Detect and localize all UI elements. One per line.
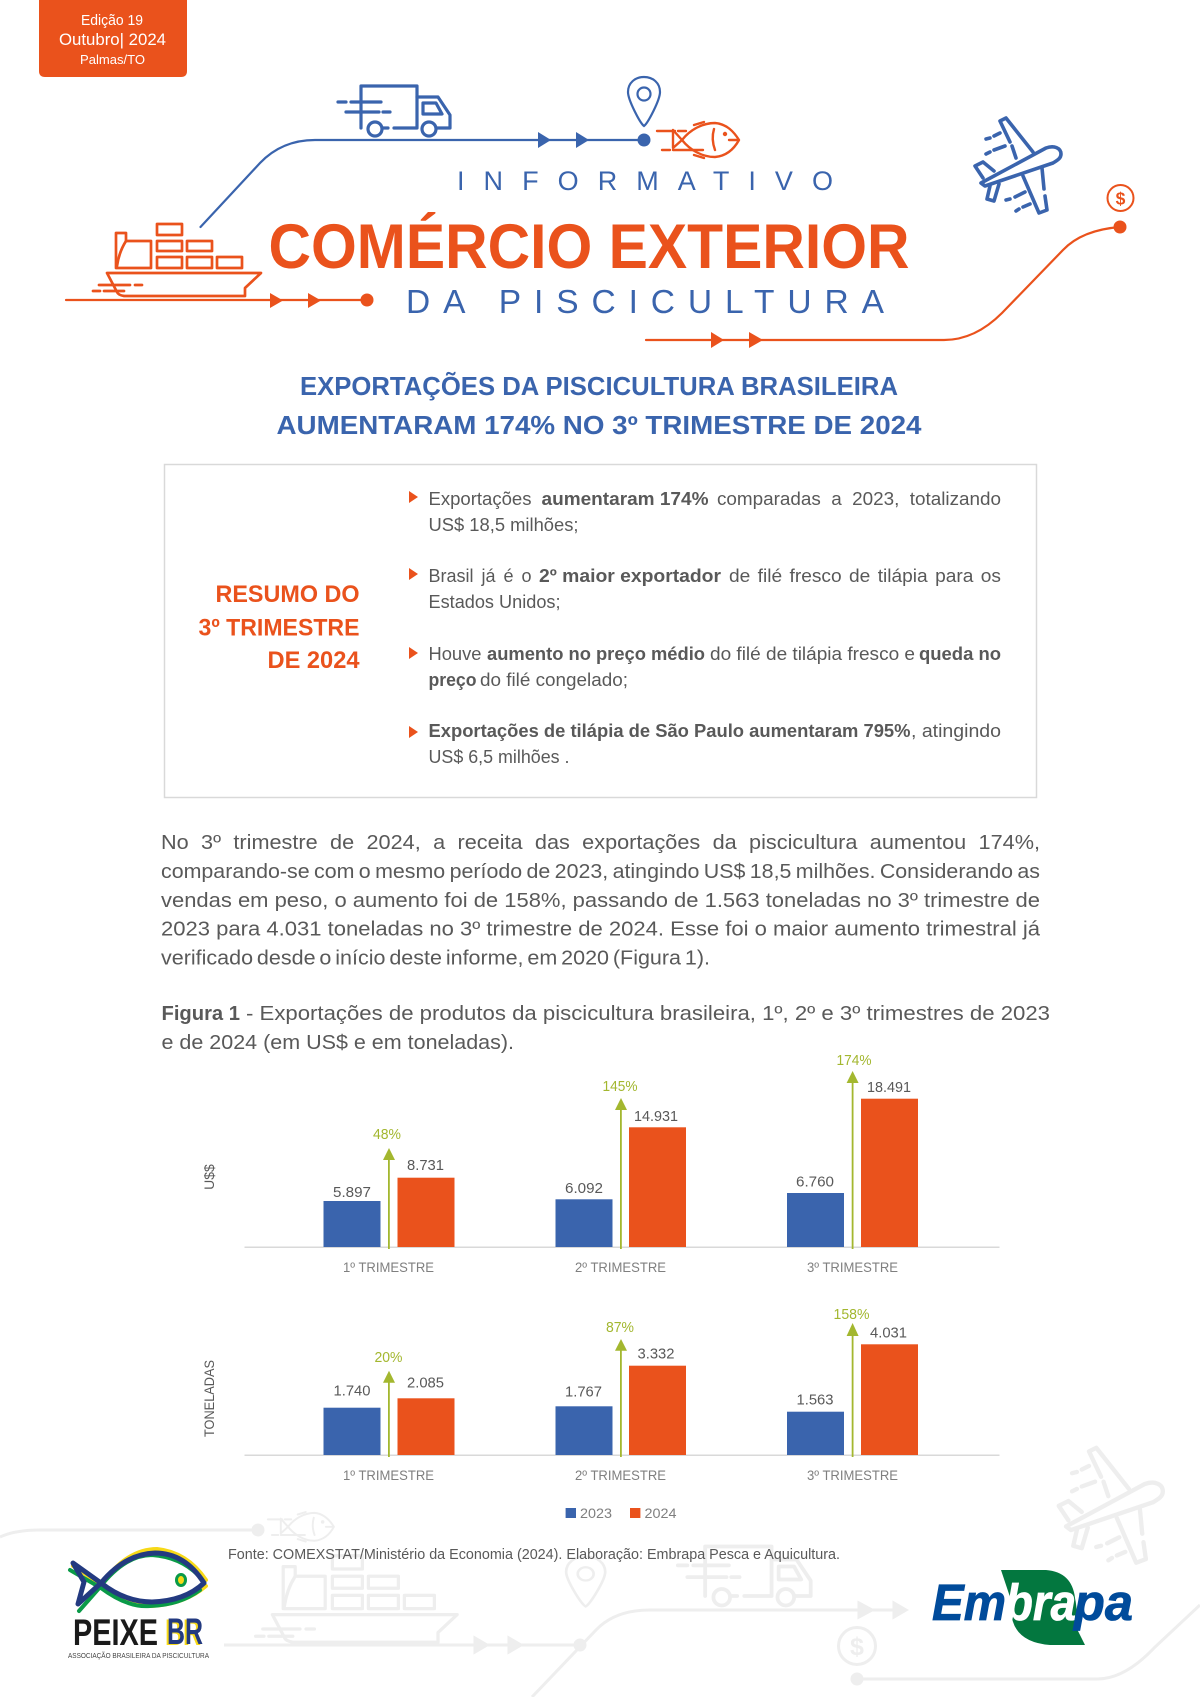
- main heading: [276, 371, 922, 440]
- axis title: toneladas: TONELADAS: [201, 1360, 217, 1437]
- legend: 2024: [644, 1505, 677, 1521]
- body paragraph: No 3º trimestre de 2024, a receita das exportações da piscicultura aumentou 174%,: [161, 831, 1040, 854]
- growth percentages: 174%: [836, 1053, 872, 1069]
- bars: [324, 1344, 918, 1455]
- watermark: coin: $: [850, 1633, 864, 1661]
- watermark: lower right route: [852, 1605, 1200, 1684]
- value labels: 6.760: [796, 1174, 834, 1190]
- bullet 3: Houve: [428, 643, 482, 664]
- category labels: 3º TRIMESTRE: [807, 1259, 898, 1275]
- category labels: 3º TRIMESTRE: [807, 1467, 898, 1483]
- title: da piscicultura: DA PISCICULTURA: [406, 284, 885, 321]
- value labels: 14.931: [634, 1109, 678, 1125]
- growth percentages: 48%: [373, 1127, 401, 1143]
- value labels: 5.897: [333, 1185, 371, 1201]
- value labels: [334, 1325, 907, 1408]
- orange route line left with arrows: [66, 293, 374, 308]
- background watermark graphics: [0, 1448, 1200, 1697]
- title: comércio exterior: COMÉRCIO EXTERIOR: [268, 212, 910, 282]
- logo wordmark: PEIXE: [73, 1612, 158, 1653]
- icon: location pin: [628, 77, 660, 126]
- value labels: 3.332: [638, 1346, 674, 1362]
- value labels: 8.731: [407, 1158, 444, 1174]
- figure caption: [162, 1002, 1050, 1054]
- watermark: fish: [268, 1512, 334, 1542]
- growth percentages: [373, 1053, 872, 1143]
- category labels: 2º TRIMESTRE: [575, 1467, 666, 1483]
- logo: Peixe BR: ASSOCIAÇÃO BRASILEIRA DA PISCICULTURA: [68, 1651, 209, 1660]
- value labels: 1.767: [565, 1385, 602, 1401]
- watermark: plane: [1059, 1448, 1163, 1563]
- bullet 3: do filé congelado;: [480, 669, 628, 690]
- watermark: coin: [838, 1628, 876, 1664]
- summary heading: RESUMO DO: [216, 581, 360, 608]
- body paragraph: verificado desde o início deste informe, em 2020 (Figura 1).: [161, 946, 710, 970]
- bullet 3: preço: [428, 669, 476, 690]
- orange route line right with arrows: [646, 220, 1126, 348]
- icon: fish: [657, 122, 739, 158]
- source note: Fonte: COMEXSTAT/Ministério da Economia (2024). Elaboração: Embrapa Pesca e Aquicultura.: [228, 1547, 840, 1563]
- body paragraph: vendas em peso, o aumento foi de 158%, passando de 1.563 toneladas no 3º trimestre de: [161, 889, 1040, 912]
- figure caption: Figura 1: [162, 1002, 240, 1025]
- bullet 4: , atingindo: [911, 720, 1001, 741]
- body paragraph: 2023 para 4.031 toneladas no 3º trimestre de 2024. Esse foi o maior aumento trimestral já: [161, 918, 1041, 940]
- bullet 3: queda no: [919, 643, 1001, 664]
- edition tag: [39, 0, 187, 77]
- logo: Embrapa: bra: [1005, 1574, 1076, 1631]
- figure caption: e de 2024 (em US$ e em toneladas).: [162, 1031, 514, 1054]
- category labels: 2º TRIMESTRE: [575, 1259, 666, 1275]
- bullet 2: 2º maior exportador: [539, 565, 721, 586]
- value labels: [333, 1080, 911, 1201]
- growth percentages: 20%: [374, 1350, 403, 1366]
- value labels: 1.563: [796, 1392, 834, 1408]
- bullet 2: Brasil já é o: [428, 565, 532, 586]
- value labels: 2.085: [407, 1375, 444, 1391]
- value labels: 1.740: [334, 1384, 370, 1400]
- growth percentages: 158%: [834, 1307, 870, 1323]
- watermark: lower route with arrows: [224, 1603, 906, 1697]
- logo: Embrapa: [932, 1570, 1133, 1645]
- edition tag: Outubro| 2024: [59, 30, 166, 49]
- bullet 1: comparadas a 2023, totalizando: [717, 488, 1001, 509]
- figure caption: - Exportações de produtos da piscicultura brasileira, 1º, 2º e 3º trimestres de 2023: [246, 1002, 1050, 1025]
- growth arrows: [383, 1323, 859, 1457]
- watermark: left route line: [0, 1525, 263, 1537]
- category labels: [343, 1467, 898, 1483]
- value labels: 4.031: [870, 1325, 907, 1341]
- summary heading: 3º TRIMESTRE: [198, 614, 360, 642]
- bullet 1: US$ 18,5 milhões;: [428, 514, 578, 535]
- icon: truck: [338, 86, 450, 136]
- logo: Embrapa: pa: [1072, 1574, 1133, 1631]
- value labels: 6.092: [565, 1181, 603, 1197]
- summary heading: DE 2024: [268, 647, 360, 674]
- icon: dollar coin: $: [1116, 188, 1126, 208]
- edition tag: Edição 19: [81, 13, 143, 29]
- legend: 2023: [580, 1505, 612, 1521]
- icon: dollar coin: [1108, 185, 1134, 211]
- watermark: truck: [678, 1546, 811, 1605]
- logo: Peixe BR: BR: [165, 1612, 201, 1653]
- bullet 3: aumento no preço médio: [487, 643, 705, 664]
- bullet 1: aumentaram 174%: [542, 488, 708, 509]
- main heading: EXPORTAÇÕES DA PISCICULTURA BRASILEIRA: [300, 371, 898, 401]
- category labels: 1º TRIMESTRE: [343, 1467, 434, 1483]
- bullet 1: Exportações: [428, 488, 532, 509]
- watermark: pin: [566, 1557, 605, 1607]
- watermark: ship: [256, 1556, 457, 1642]
- title: informativo: INFORMATIVO: [457, 166, 833, 196]
- logo fish: [70, 1549, 206, 1611]
- summary heading: [198, 581, 360, 674]
- bullet 2: de filé fresco de tilápia para os: [729, 565, 1001, 586]
- logo: Peixe BR: BR: [167, 1611, 203, 1652]
- category labels: [343, 1259, 898, 1275]
- legend: [566, 1505, 677, 1521]
- blue route line with arrows: [200, 132, 650, 227]
- growth percentages: 87%: [606, 1320, 634, 1336]
- axis title: US$: U$$: [201, 1164, 217, 1190]
- logo: Embrapa: Em: [932, 1574, 1006, 1631]
- bar chart: toneladas: [201, 1307, 1000, 1483]
- bullet 4: US$ 6,5 milhões .: [428, 746, 570, 767]
- growth percentages: 145%: [602, 1079, 638, 1095]
- bars: [324, 1099, 918, 1247]
- edition tag: Palmas/TO: [80, 52, 145, 67]
- growth percentages: [374, 1307, 870, 1366]
- icon: ship: [93, 224, 261, 296]
- icon: airplane: [975, 118, 1061, 213]
- body paragraph: comparando-se com o mesmo período de 2023, atingindo US$ 18,5 milhões. Considerando as: [161, 860, 1040, 883]
- bullet 4: Exportações de tilápia de São Paulo aumentaram 795%: [428, 720, 910, 741]
- panel: summary: [164, 464, 1036, 798]
- bullet 2: [409, 565, 1001, 612]
- value labels: 18.491: [867, 1080, 911, 1096]
- bar chart: US$: [201, 1053, 1000, 1275]
- growth arrows: [383, 1071, 859, 1249]
- body paragraph: [161, 831, 1041, 970]
- bullet 3: do filé de tilápia fresco e: [710, 643, 915, 664]
- bullet 1: [409, 488, 1001, 535]
- bullet 4: [409, 720, 1001, 767]
- category labels: 1º TRIMESTRE: [343, 1259, 434, 1275]
- bullet 3: [409, 643, 1001, 690]
- logo: Peixe BR: [68, 1549, 209, 1660]
- bullet 2: Estados Unidos;: [428, 591, 560, 612]
- main heading: AUMENTARAM 174% NO 3º TRIMESTRE DE 2024: [276, 410, 922, 440]
